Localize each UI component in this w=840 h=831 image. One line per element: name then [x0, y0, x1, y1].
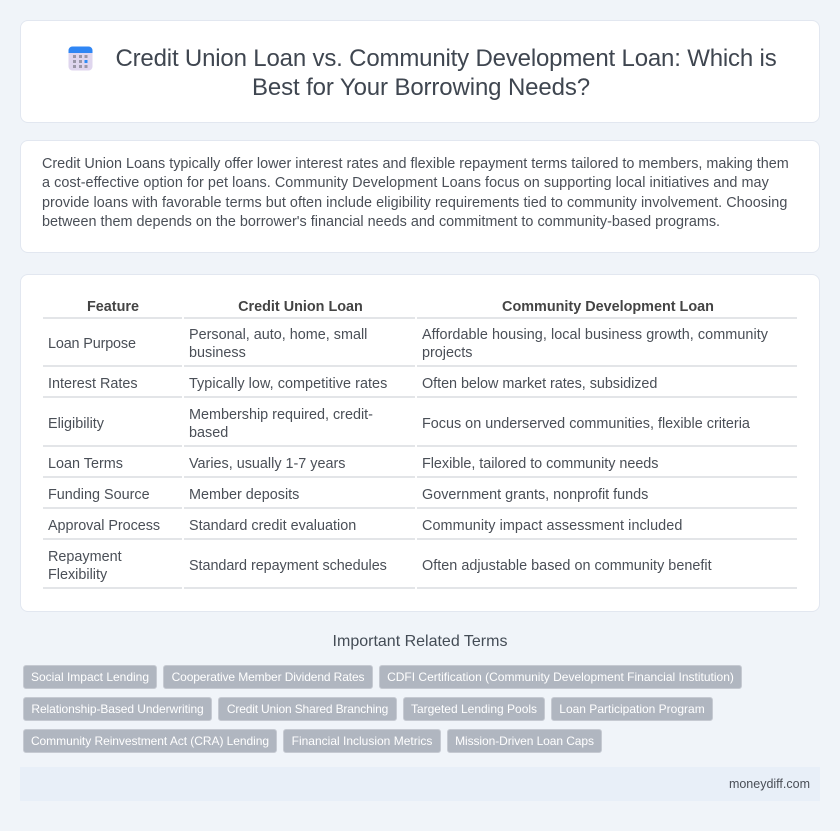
row: approval process: Community impact assessment included [422, 518, 682, 534]
row: eligibility: Membership required, credit- [189, 407, 373, 423]
row: loan terms: Flexible, tailored to community needs [422, 456, 658, 472]
tag: Targeted Lending Pools [411, 702, 537, 716]
row: repayment flexibility: Often adjustable based on community benefit [422, 558, 712, 574]
tag [379, 665, 742, 689]
tag: Financial Inclusion Metrics [292, 734, 432, 748]
row: interest rates: Interest Rates [48, 376, 138, 392]
tag [23, 697, 212, 721]
row: funding source: Member deposits [189, 487, 299, 503]
row: interest rates [43, 376, 797, 398]
tag [283, 729, 441, 753]
table header row: Feature [87, 299, 139, 315]
intro paragraph: between them depends on the borrower's financial needs and commitment to community-based programs. [42, 214, 720, 230]
tag [551, 697, 713, 721]
row: loan purpose: Loan Purpose [48, 336, 136, 352]
row: loan terms: Varies, usually 1-7 years [189, 456, 346, 472]
row: repayment flexibility: Repayment [48, 549, 122, 565]
icon: calendar [68, 46, 92, 70]
tag: Loan Participation Program [559, 702, 705, 716]
row: approval process: Standard credit evaluation [189, 518, 356, 534]
intro text panel [20, 140, 820, 253]
intro paragraph: provide loans with favorable terms but often include eligibility requirements tied to community involvement. Choosing [42, 195, 787, 211]
tag [163, 665, 373, 689]
title: Credit Union Loan vs. Community Development Loan: Which is [115, 45, 777, 72]
title [115, 45, 777, 101]
related terms tags [23, 665, 742, 753]
tag [218, 697, 397, 721]
tag [23, 729, 277, 753]
comparison table panel [20, 274, 820, 612]
row: repayment flexibility: Flexibility [48, 567, 107, 583]
related terms heading: Important Related Terms [333, 633, 507, 650]
tag: Mission-Driven Loan Caps [455, 734, 594, 748]
intro paragraph [42, 156, 789, 230]
tag: Social Impact Lending [31, 670, 149, 684]
row: loan purpose: Affordable housing, local business growth, community [422, 327, 768, 343]
table header row: Community Development Loan [502, 299, 714, 315]
table header row [43, 299, 797, 319]
tag: Relationship-Based Underwriting [31, 702, 204, 716]
row: eligibility: Focus on underserved communities, flexible criteria [422, 416, 750, 432]
row: approval process: Approval Process [48, 518, 160, 534]
row: interest rates: Typically low, competitive rates [189, 376, 387, 392]
footer bar [20, 767, 820, 801]
row: repayment flexibility: Standard repayment schedules [189, 558, 387, 574]
table header row: Credit Union Loan [238, 299, 363, 315]
row: interest rates: Often below market rates, subsidized [422, 376, 657, 392]
row: eligibility: based [189, 425, 228, 441]
row: eligibility [43, 407, 797, 447]
tag [403, 697, 545, 721]
intro paragraph: a cost-effective option for pet loans. Community Development Loans focus on supporting local initiatives and may [42, 175, 769, 191]
tag: Credit Union Shared Branching [227, 702, 388, 716]
row: funding source: Funding Source [48, 487, 150, 503]
row: loan terms: Loan Terms [48, 456, 123, 472]
tag: Community Reinvestment Act (CRA) Lending [31, 734, 269, 748]
tag [447, 729, 602, 753]
footer source text: moneydiff.com [729, 777, 810, 791]
row: loan terms [43, 456, 797, 478]
intro paragraph: Credit Union Loans typically offer lower interest rates and flexible repayment terms tailored to members, making them [42, 156, 789, 172]
row: repayment flexibility [43, 549, 797, 589]
title: Best for Your Borrowing Needs? [252, 74, 590, 101]
row: approval process [43, 518, 797, 540]
tag: Cooperative Member Dividend Rates [172, 670, 364, 684]
row: loan purpose: business [189, 345, 246, 361]
row: loan purpose: projects [422, 345, 472, 361]
row: loan purpose [43, 327, 797, 367]
header panel [20, 20, 820, 123]
row: loan purpose: Personal, auto, home, small [189, 327, 367, 343]
row: funding source [43, 487, 797, 509]
tag [23, 665, 157, 689]
row: eligibility: Eligibility [48, 416, 104, 432]
tag: CDFI Certification (Community Development Financial Institution) [387, 670, 734, 684]
row: funding source: Government grants, nonprofit funds [422, 487, 648, 503]
